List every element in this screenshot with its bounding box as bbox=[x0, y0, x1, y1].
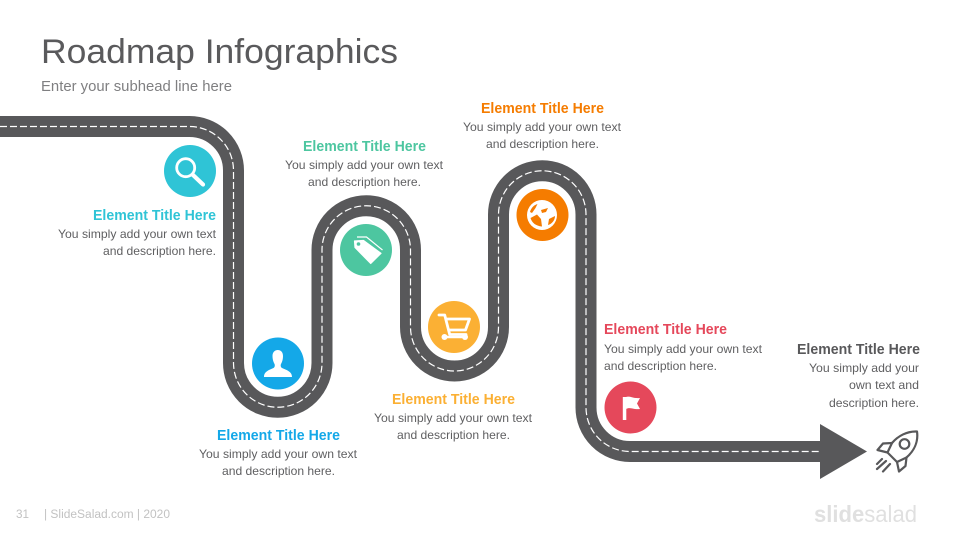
step 2 description: You simply add your own text bbox=[285, 158, 444, 172]
step 4 description: and description here. bbox=[222, 464, 335, 478]
step 3 heading: Element Title Here bbox=[481, 101, 604, 117]
step 6: flag bbox=[604, 322, 763, 434]
step 6 description: You simply add your own text bbox=[604, 342, 763, 356]
icon: rocket bbox=[877, 431, 917, 472]
step 3: globe bbox=[463, 101, 622, 241]
step 6 heading: Element Title Here bbox=[604, 322, 727, 338]
title: Roadmap Infographics bbox=[41, 33, 398, 71]
step 4 description: You simply add your own text bbox=[199, 447, 358, 461]
step 5 heading: Element Title Here bbox=[392, 392, 515, 408]
step 6 description: and description here. bbox=[604, 359, 717, 373]
icon: shopping cart bbox=[428, 301, 480, 353]
step 3 description: and description here. bbox=[486, 137, 599, 151]
step 2 description: and description here. bbox=[308, 175, 421, 189]
step 1 description bbox=[58, 227, 217, 258]
step 7 description: description here. bbox=[829, 396, 919, 410]
step 7 description: You simply add your bbox=[809, 361, 919, 375]
step 3 description: You simply add your own text bbox=[463, 120, 622, 134]
step 6 description bbox=[604, 342, 763, 373]
step 2 description bbox=[285, 158, 444, 189]
page number: 31 bbox=[16, 509, 29, 521]
step 1 description: You simply add your own text bbox=[58, 227, 217, 241]
step 4: person bbox=[199, 338, 358, 478]
subhead: Enter your subhead line here bbox=[41, 78, 232, 95]
logo wordmark: slidesalad bbox=[814, 501, 917, 527]
step 5 description: You simply add your own text bbox=[374, 411, 533, 425]
step 4 heading: Element Title Here bbox=[217, 428, 340, 444]
footer source: | SlideSalad.com | 2020 bbox=[44, 509, 170, 521]
icon: person bbox=[252, 338, 304, 390]
step 5: cart bbox=[374, 301, 533, 442]
step 5 description bbox=[374, 411, 533, 442]
step 2 heading: Element Title Here bbox=[303, 139, 426, 155]
winding road with arrow bbox=[0, 126, 867, 479]
step 3 description bbox=[463, 120, 622, 151]
step 4 description bbox=[199, 447, 358, 478]
step 7 description bbox=[809, 361, 919, 410]
step 7 heading: Element Title Here bbox=[797, 342, 920, 358]
step 1 description: and description here. bbox=[103, 244, 216, 258]
step 1: search bbox=[58, 145, 217, 258]
icon: magnifier bbox=[164, 145, 216, 197]
step 7: destination bbox=[797, 342, 920, 410]
icon: globe bbox=[516, 189, 568, 241]
step 5 description: and description here. bbox=[397, 428, 510, 442]
icon: flag bbox=[604, 382, 656, 434]
step 7 description: own text and bbox=[849, 378, 919, 392]
step 2: tag bbox=[285, 139, 444, 276]
icon: price tag bbox=[340, 224, 392, 276]
step 1 heading: Element Title Here bbox=[93, 208, 216, 224]
